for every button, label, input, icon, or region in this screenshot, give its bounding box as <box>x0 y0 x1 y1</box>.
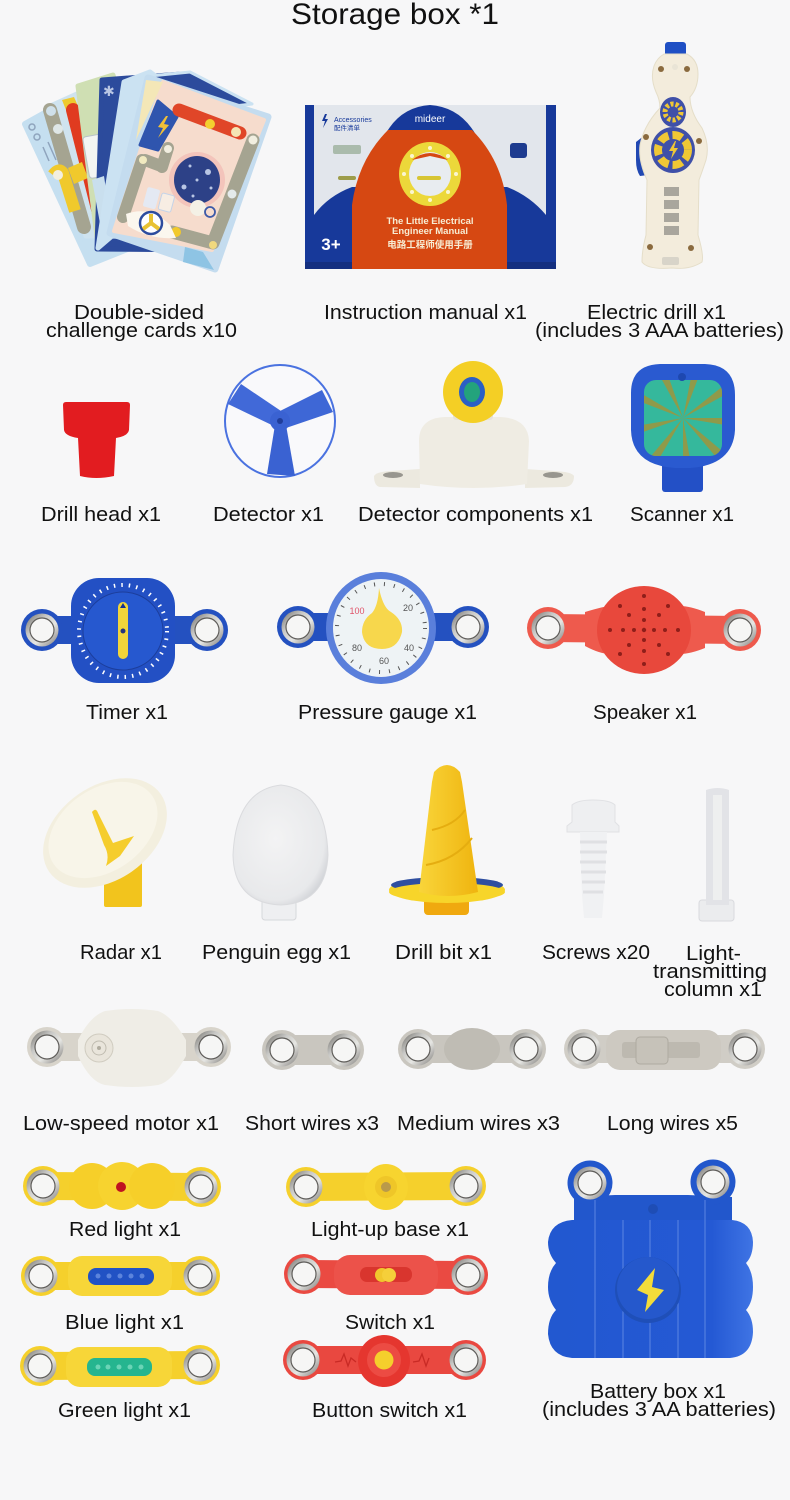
icon: gauge module: 100 <box>349 606 365 616</box>
icon: manual cover: mideer <box>415 114 446 125</box>
label: column x1 <box>664 979 762 1001</box>
label: Detector components x1 <box>358 504 593 526</box>
label: transmitting <box>653 961 767 983</box>
item: timer <box>21 578 228 724</box>
icon: manual cover: Accessories <box>334 117 372 124</box>
label: Short wires x3 <box>245 1113 379 1135</box>
item: drill head <box>41 402 161 526</box>
item: red light <box>23 1162 221 1241</box>
label: Radar x1 <box>80 942 162 964</box>
item: battery box <box>542 1160 776 1421</box>
label <box>46 302 237 342</box>
icon: timer module <box>21 578 228 683</box>
item: instruction manual <box>305 105 556 324</box>
item: electric drill <box>535 42 784 342</box>
label: Battery box x1 <box>590 1381 726 1403</box>
label: Double-sided <box>74 302 204 324</box>
icon: gauge module <box>277 572 489 684</box>
label: Speaker x1 <box>593 702 697 724</box>
label: challenge cards x10 <box>46 320 237 342</box>
icon: manual cover: The Little Electrical <box>386 216 474 227</box>
label <box>535 302 784 342</box>
item: pressure gauge <box>277 572 489 724</box>
icon: clear screw <box>567 800 619 918</box>
item: penguin egg <box>202 785 351 964</box>
label: Pressure gauge x1 <box>298 702 477 724</box>
label: Penguin egg x1 <box>202 942 351 964</box>
label: Screws x20 <box>542 942 650 964</box>
icon: fan of cards: ✱ <box>103 83 115 99</box>
label: Light-up base x1 <box>311 1219 469 1241</box>
icon: short wire <box>262 1030 364 1070</box>
icon: red light module <box>23 1162 221 1210</box>
icon: speaker module <box>527 586 761 674</box>
label: Timer x1 <box>86 702 168 724</box>
item: light-up base <box>286 1164 486 1241</box>
icon: light-up base module <box>286 1164 486 1210</box>
icon: yellow cone on disc <box>389 765 505 915</box>
label: Instruction manual x1 <box>324 302 527 324</box>
icon: manual cover: Engineer Manual <box>392 226 468 237</box>
label: Electric drill x1 <box>587 302 726 324</box>
label: Low-speed motor x1 <box>23 1113 219 1135</box>
label: Detector x1 <box>213 504 324 526</box>
item: switch <box>284 1254 488 1334</box>
label: Green light x1 <box>58 1400 191 1422</box>
icon: scanner <box>631 364 735 492</box>
icon: gauge module: 60 <box>379 656 389 666</box>
label <box>653 943 767 1001</box>
item: long wires <box>564 1029 765 1135</box>
item: short wires <box>245 1030 379 1135</box>
icon: manual cover: 3+ <box>321 235 341 254</box>
icon: blue light module <box>21 1256 220 1296</box>
label: (includes 3 AAA batteries) <box>535 320 784 342</box>
item: blue light <box>21 1256 220 1334</box>
label: Scanner x1 <box>630 504 734 526</box>
item: button switch <box>283 1335 486 1422</box>
icon: long wire <box>564 1029 765 1070</box>
icon: motor <box>27 1009 231 1087</box>
icon: propeller <box>225 365 335 477</box>
item: light-transmitting column <box>653 788 767 1001</box>
label: Long wires x5 <box>607 1113 738 1135</box>
icon: button switch module <box>283 1335 486 1387</box>
label: Medium wires x3 <box>397 1113 560 1135</box>
item: speaker <box>527 586 761 724</box>
label: (includes 3 AA batteries) <box>542 1399 776 1421</box>
item: detector components <box>358 361 593 526</box>
item: scanner <box>630 364 735 526</box>
item: radar <box>22 755 188 964</box>
icon: radar dish <box>22 755 188 911</box>
icon: gauge module: 20 <box>403 603 413 613</box>
label: Drill bit x1 <box>395 942 492 964</box>
label <box>542 1381 776 1421</box>
icon: medium wire <box>398 1028 546 1070</box>
label: Light- <box>686 943 741 965</box>
label: Drill head x1 <box>41 504 161 526</box>
item: screws <box>542 800 650 964</box>
icon: translucent egg <box>233 785 328 920</box>
icon: red drill head <box>63 402 130 478</box>
label: Blue light x1 <box>65 1312 184 1334</box>
item: green light <box>20 1345 220 1422</box>
icon: green light module <box>20 1345 220 1387</box>
icon: gauge module: 40 <box>404 643 414 653</box>
icon: gauge module: 80 <box>352 643 362 653</box>
icon: manual cover: 电路工程师使用手册 <box>387 239 473 251</box>
icon: drill <box>636 42 707 268</box>
icon: fan of cards <box>25 72 268 270</box>
icon: detector on base <box>374 361 574 488</box>
label: Button switch x1 <box>312 1400 467 1422</box>
label: Red light x1 <box>69 1219 181 1241</box>
item: drill bit <box>389 765 505 964</box>
item: medium wires <box>397 1028 560 1135</box>
label: Switch x1 <box>345 1312 435 1334</box>
item: detector <box>213 365 335 526</box>
icon: switch module <box>284 1254 488 1295</box>
icon: manual cover <box>305 105 556 269</box>
icon: clear column <box>699 788 734 921</box>
icon: battery box <box>548 1160 753 1358</box>
item: challenge cards <box>25 72 268 342</box>
item: low-speed motor <box>23 1009 231 1135</box>
icon: manual cover: 配件清单 <box>334 123 360 132</box>
